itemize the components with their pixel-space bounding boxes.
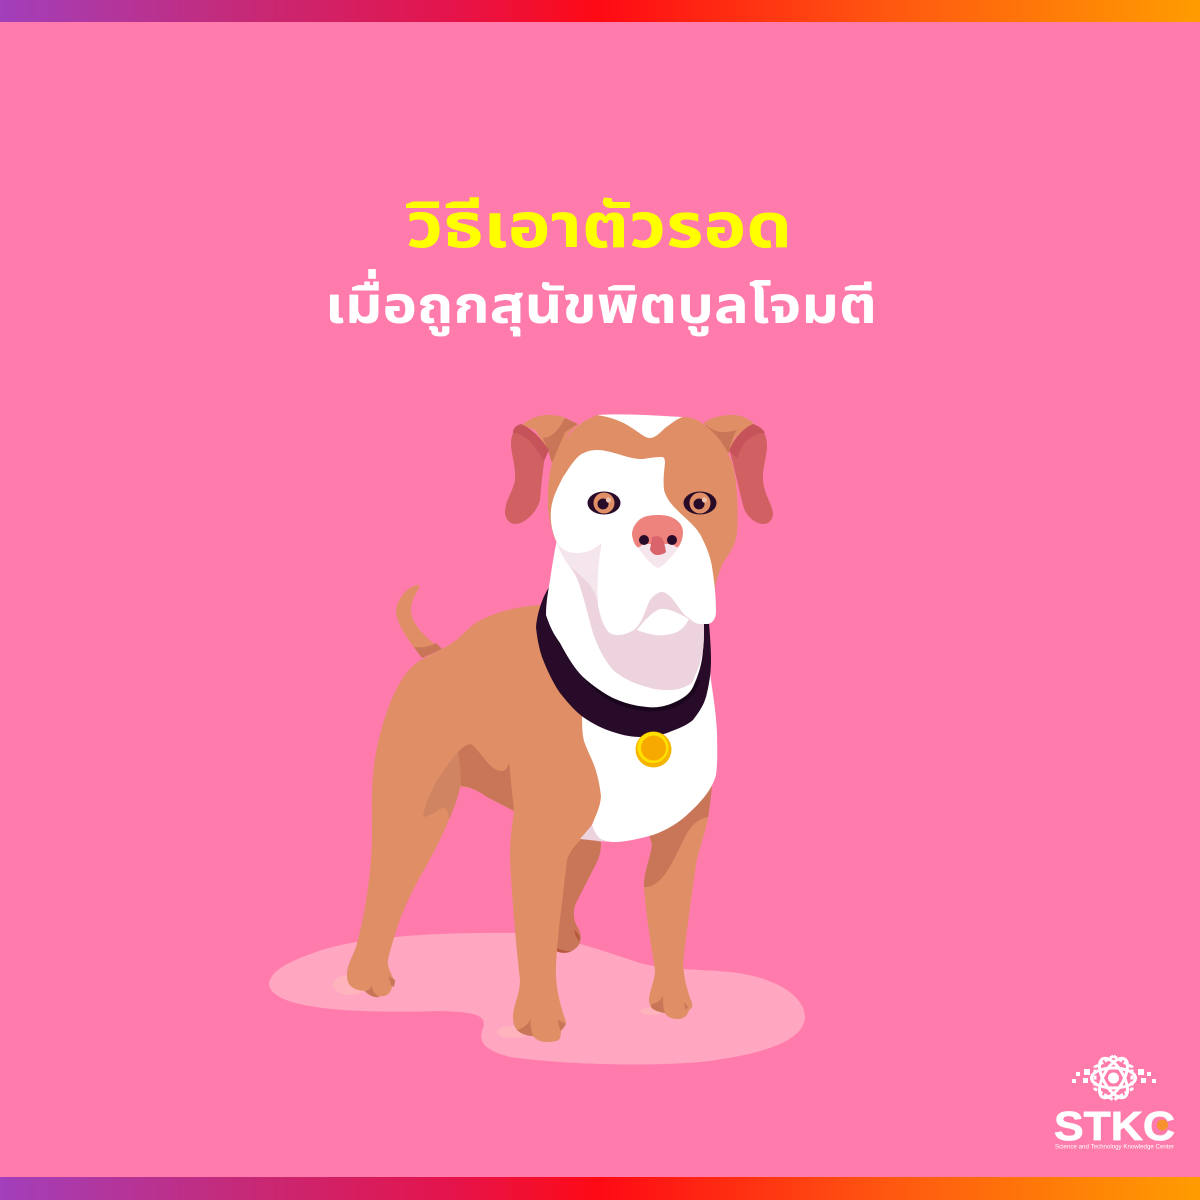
tail: [396, 585, 442, 658]
nose: [632, 515, 683, 555]
neck shadow: [567, 555, 704, 690]
logo orange dot: [1157, 1120, 1168, 1130]
bottom gradient bar: [0, 1177, 1200, 1200]
top gradient bar: [0, 0, 1200, 22]
dog illustration: [347, 414, 773, 1042]
ground puddle: [269, 933, 805, 1064]
STKC logo: [1054, 1054, 1175, 1150]
white face: [551, 450, 716, 635]
logo wordmark: STKC: [1054, 1103, 1175, 1149]
chest lilac sliver: [580, 825, 608, 842]
hind paw toe shadow: [365, 976, 395, 997]
white neck: [546, 540, 704, 707]
logo tagline: Science and Technology Knowledge Center: [1055, 1144, 1174, 1150]
mouth: [637, 609, 689, 635]
right eye: [684, 492, 716, 514]
ear: right: [704, 415, 773, 524]
forehead blaze: [597, 414, 683, 438]
left eye: [588, 492, 620, 514]
collar tag: [636, 732, 672, 768]
title line 1: วิธีเอาตัวรอด: [405, 192, 792, 261]
white chest: [582, 673, 717, 842]
cheek shade: [557, 543, 601, 600]
title: [325, 192, 877, 337]
body shadow: [423, 744, 514, 820]
head fur: [548, 415, 738, 592]
ear: left: [505, 415, 578, 524]
logo atom icon: [1092, 1054, 1136, 1102]
collar: [536, 587, 711, 737]
far front leg: [552, 835, 601, 953]
logo pixel squares: [1072, 1069, 1156, 1083]
head: [548, 414, 738, 690]
muzzle shade: [637, 540, 680, 568]
title line 2: เมื่อถูกสุนัขพิตบูลโจมตี: [325, 269, 877, 337]
body and hind leg: [347, 600, 640, 1042]
far hind leg: [640, 770, 713, 1019]
paw shadows: [333, 975, 664, 1038]
front paw toe shadow: [517, 1018, 566, 1036]
